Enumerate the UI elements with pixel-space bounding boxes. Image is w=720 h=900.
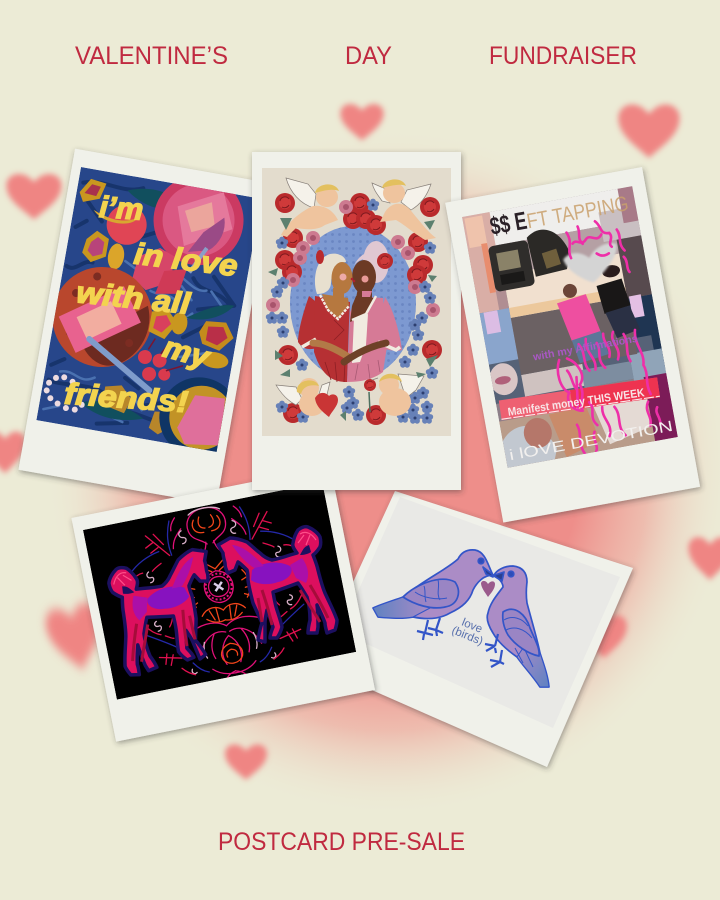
cherries (138, 350, 170, 381)
silver heart (562, 242, 618, 282)
magenta flames (556, 220, 662, 454)
blue oval with dots (290, 226, 416, 380)
leaves (268, 218, 438, 421)
illustration: left dove (373, 550, 493, 640)
hand-lettered title text: my (160, 331, 214, 375)
caption: love (birds): love (460, 617, 484, 636)
medallion (205, 572, 232, 600)
postcard art: mirrored horses on black (83, 490, 356, 700)
hand-lettered title text: friends! (63, 378, 189, 419)
hand-lettered title text: i’m (98, 191, 144, 227)
polaroid: EFT tapping collage (445, 167, 700, 523)
polaroid: Marie Antoinette style lovers (252, 152, 461, 490)
collage text (490, 196, 672, 460)
collage text: with my Affirmations (531, 333, 639, 364)
black phone and bag (488, 240, 535, 292)
top pink plate (154, 183, 244, 266)
hand-lettered title text: in love (132, 238, 239, 283)
hand-lettered title text: with all (75, 276, 192, 321)
hand-lettered title text (64, 194, 238, 413)
polaroid: love birds (315, 491, 633, 767)
footer heading: postcard pre-sale: POSTCARD PRE-SALE (218, 828, 465, 856)
locket cluster right (148, 310, 174, 340)
cake bottom right (159, 377, 228, 452)
cherubs (276, 178, 436, 417)
postcard art: glitch collage (460, 186, 678, 470)
collage text: Manifest money THIS WEEK (507, 387, 646, 419)
clasped hands (313, 343, 386, 362)
red dress figure (298, 250, 353, 382)
illustration: right dove (485, 566, 549, 687)
polaroid: horses (71, 466, 375, 742)
heading: Fundraiser: FUNDRAISER (489, 42, 637, 70)
heading: Day: DAY (345, 42, 392, 70)
postcard art: dinner table (36, 167, 252, 452)
gold lockets (80, 178, 106, 202)
collage text: i lOVE DEVOTION (508, 418, 674, 464)
central ornament, left half (132, 507, 236, 678)
pink dress figure (347, 241, 402, 382)
central ornament, right half (202, 505, 304, 674)
flowers: blue (266, 199, 438, 424)
flowers: pink (266, 200, 440, 317)
bottom portrait photo (499, 391, 678, 468)
caption: love (birds): (birds) (450, 625, 485, 648)
collage blocks (460, 186, 667, 409)
polaroid: I'm in love with all my friends (16, 148, 252, 500)
left horse (107, 548, 210, 677)
people scene (503, 254, 637, 375)
postcard art: parchment background (262, 168, 451, 436)
brown plate with cake (53, 267, 152, 367)
flowers: roses (275, 193, 442, 425)
small red plate (106, 206, 147, 245)
right horse (218, 527, 337, 642)
heading: Valentine's: VALENTINE’S (75, 42, 228, 70)
postcard art: paper background (340, 497, 620, 728)
pink banner (499, 377, 660, 420)
blurred background hearts (0, 104, 720, 780)
collage text: FT TAPPING (525, 192, 630, 233)
icon: heart between doves (481, 581, 495, 597)
collage text: $$ E (488, 207, 529, 241)
pearls (44, 374, 85, 413)
